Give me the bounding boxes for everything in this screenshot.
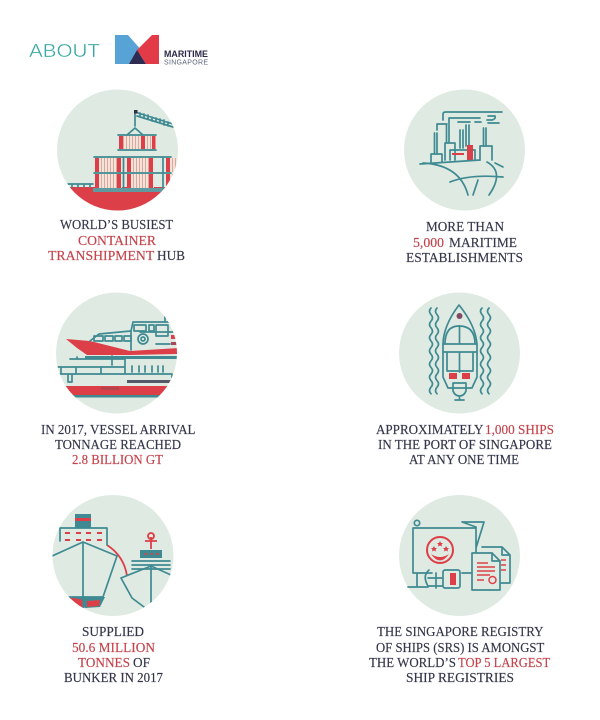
text: more than 5,000 maritime establishments: MORE THAN [426,219,504,234]
panel: maritime establishments [404,90,525,265]
icon: two vessels [47,292,180,414]
text: supplied 50.6 million tonnes of bunker: BUNKER IN 2017 [64,670,163,685]
logo: maritime singapore [115,35,208,66]
panel: ships in port [376,292,557,467]
text: supplied 50.6 million tonnes of bunker: OF [133,655,150,670]
panel: ship registry [369,495,553,685]
text: world's busiest container transhipment hub: WORLD’S BUSIEST [60,217,174,232]
panel: container transhipment [48,90,193,263]
icon: factory by a road [404,90,525,210]
icon: bunkering ships [50,495,174,616]
text: singapore registry of ships: THE WORLD’S [369,655,456,670]
text: more than 5,000 maritime establishments: 5,000 [413,235,444,250]
text: supplied 50.6 million tonnes of bunker: TONNES [78,655,130,670]
text: more than 5,000 maritime establishments: MARITIME [449,235,517,250]
text: world's busiest container transhipment hub: HUB [157,248,185,263]
panel: bunker supply [50,495,174,685]
text: singapore registry of ships: TOP 5 LARGEST [458,655,551,670]
header: about maritime singapore [29,35,208,66]
text: vessel arrival tonnage reached: TONNAGE REACHED [55,437,181,452]
icon: boat from above with waves [399,292,520,414]
text: vessel arrival tonnage reached: IN 2017, VESSEL ARRIVAL [41,422,195,437]
text: approximately 1,000 ships: IN THE PORT OF SINGAPORE [378,437,552,452]
text: approximately 1,000 ships: APPROXIMATELY [376,422,484,437]
icon: flag and documents [399,495,520,616]
text: singapore registry of ships: THE SINGAPORE REGISTRY [377,624,544,639]
icon: container ship and crane [57,90,178,210]
text: singapore registry of ships: SHIP REGISTRIES [406,670,514,685]
text: world's busiest container transhipment hub: TRANSHIPMENT [48,248,155,263]
text: supplied 50.6 million tonnes of bunker: 50.6 MILLION [72,640,155,655]
panel: vessel arrival tonnage [41,292,198,467]
heading: about: ABOUT [29,41,100,61]
logo: maritime singapore: MARITIME [164,49,208,59]
text: approximately 1,000 ships: 1,000 SHIPS [485,422,554,437]
text: vessel arrival tonnage reached: 2.8 BILLION GT [72,452,164,467]
text: approximately 1,000 ships: AT ANY ONE TIME [409,452,519,467]
logo: maritime singapore: SINGAPORE [164,60,208,66]
text: world's busiest container transhipment hub: CONTAINER [78,233,156,248]
text: supplied 50.6 million tonnes of bunker: SUPPLIED [82,624,144,639]
text: singapore registry of ships: OF SHIPS (SRS) IS AMONGST [376,640,545,655]
text: more than 5,000 maritime establishments: ESTABLISHMENTS [406,250,523,265]
